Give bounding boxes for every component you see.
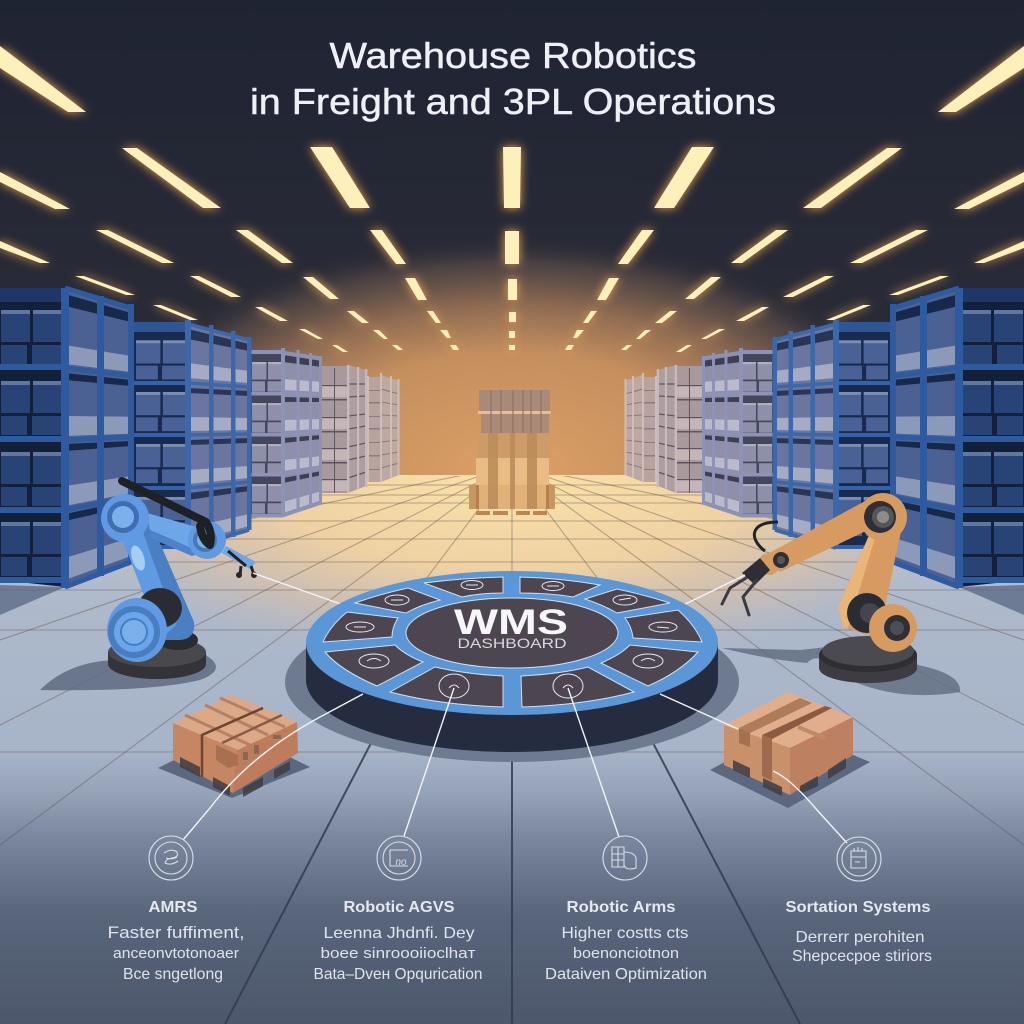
WMS heading: WMS	[454, 603, 568, 642]
feature column: Robotic AGVS: Leenna Jhdnfi. Dey	[324, 925, 474, 942]
title: in Freight and 3PL Operations	[250, 81, 776, 122]
floor	[0, 465, 1024, 1024]
feature column: AMRS: Faster fuffiment,	[108, 923, 244, 942]
feature column: AMRS: Bce sngetlong	[123, 966, 223, 983]
dashboard segment icons	[346, 580, 677, 698]
icon: Sortation Systems	[837, 837, 881, 881]
feature column: AMRS	[108, 836, 244, 983]
left blue robotic arm	[40, 481, 257, 690]
icon: AMRS	[149, 836, 193, 880]
right orange robotic arm	[722, 493, 960, 695]
feature column: Sortation Systems: Shepcecpoe stiriors	[792, 948, 932, 965]
WMS dashboard platform	[285, 571, 739, 762]
icon: AGVS	[377, 836, 421, 880]
feature column: Robotic AGVS: boee sinroooiioclhaт	[320, 945, 476, 962]
dashboard ring segments	[323, 577, 702, 707]
icon: AGVS: no	[395, 857, 407, 868]
left storage racks	[0, 288, 400, 588]
right cardboard pallet	[710, 692, 870, 808]
connector lines from robots to dashboard	[253, 573, 745, 610]
rack shadows on floor	[0, 585, 1024, 615]
feature column: AMRS: AMRS	[148, 899, 198, 916]
feature column: Robotic Arms: boenonciotnon	[573, 945, 679, 962]
icon: Robotic Arms	[603, 836, 647, 880]
feature column: Sortation Systems: Derrerr perohiten	[796, 929, 924, 946]
warm back glow	[0, 230, 1024, 480]
feature column: Robotic AGVS	[314, 836, 482, 983]
central pallet stack	[469, 390, 555, 515]
dashboard subheading: DASHBOARD	[458, 635, 566, 651]
title: Warehouse Robotics	[330, 35, 696, 76]
feature column: Robotic Arms: Robotic Arms	[566, 899, 676, 916]
feature column: Robotic Arms: Higher costts cts	[562, 925, 688, 942]
dashboard center hub	[406, 598, 618, 668]
ceiling lights	[0, 46, 1024, 352]
feature column: Robotic Arms: Dataiven Optimization	[545, 966, 707, 983]
connector lines to feature columns	[183, 688, 847, 843]
right storage racks	[624, 288, 1024, 588]
feature column: Robotic AGVS: Bata–Dveн Opqurication	[314, 966, 482, 983]
feature column: Robotic AGVS: Robotic AGVS	[344, 899, 455, 916]
feature column: AMRS: anceonvtotonoaer	[113, 945, 239, 962]
title	[250, 35, 776, 122]
feature column: Sortation Systems: Sortation Systems	[786, 899, 931, 916]
feature column: Sortation Systems	[786, 837, 932, 965]
ceiling background	[0, 0, 1024, 480]
feature column: Robotic Arms	[545, 836, 707, 983]
left cardboard pallet	[158, 695, 310, 798]
